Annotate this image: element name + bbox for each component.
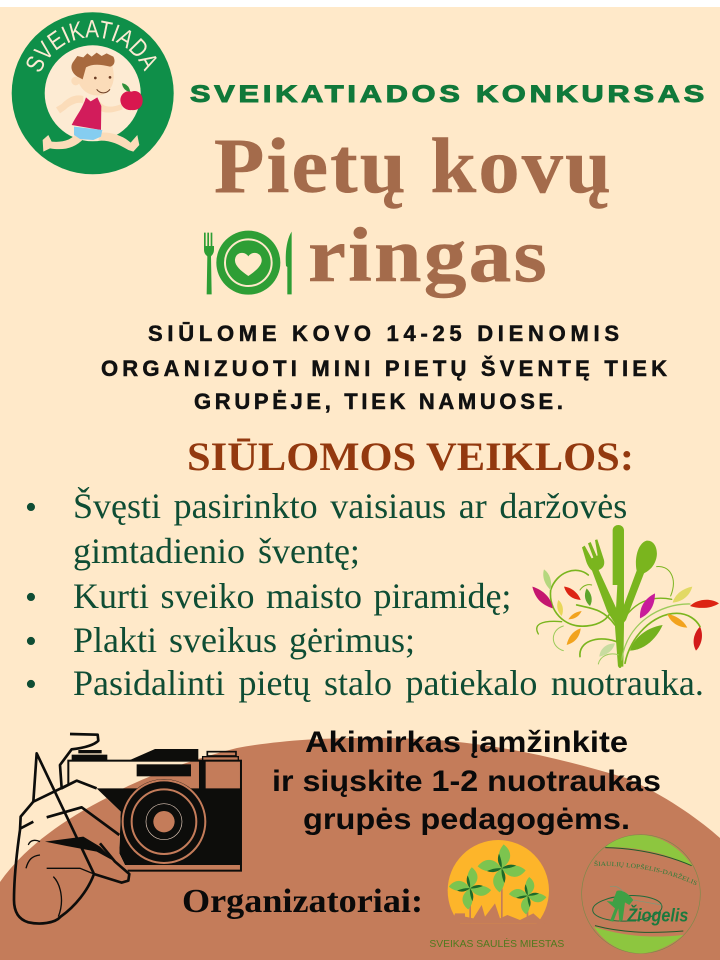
skyline xyxy=(452,903,545,924)
logo: Ziogelis kindergarten xyxy=(581,834,701,954)
boy hair xyxy=(71,53,115,79)
boy head xyxy=(78,63,114,96)
caption: SVEIKAS SAULĖS MIESTAS xyxy=(429,939,564,950)
logo: Sveikatiada xyxy=(12,12,174,174)
activity list: • xyxy=(25,666,37,703)
boy face xyxy=(94,77,97,79)
activity list: Plakti sveikus gėrimus; xyxy=(73,620,415,660)
intro text: ORGANIZUOTI MINI PIETŲ ŠVENTĘ TIEK xyxy=(101,356,667,381)
heading: Siūlomos veiklos: SIŪLOMOS VEIKLOS: xyxy=(187,434,634,479)
grasshopper xyxy=(592,886,663,923)
illustration: hand holding camera xyxy=(12,732,242,925)
pinwheels xyxy=(449,844,546,923)
logo: Sveikatiada: SVEIKATIADA xyxy=(26,20,157,72)
camera lens xyxy=(121,779,207,864)
boy arms xyxy=(56,95,123,113)
title line 1: Pietų kovų xyxy=(214,122,613,209)
leaves xyxy=(532,587,553,608)
brown hill shape xyxy=(0,738,720,960)
camera body xyxy=(68,749,242,871)
heading: Sveikatiados konkursas: SVEIKATIADOS KONKURSAS xyxy=(190,81,708,108)
call to action text: Akimirkas įamžinkite xyxy=(305,726,628,759)
activity list: Švęsti pasirinkto vaisiaus ar daržovės xyxy=(73,486,627,526)
boy shirt xyxy=(72,97,101,130)
call to action text: grupės pedagogėms. xyxy=(303,803,630,836)
intro text: GRUPĖJE, TIEK NAMUOSE. xyxy=(194,389,563,414)
hand xyxy=(12,732,131,925)
logo: Ziogelis kindergarten: Žiogelis xyxy=(626,905,688,926)
icon: plate with heart, fork and knife xyxy=(204,231,292,295)
intro text xyxy=(101,321,667,414)
boy legs xyxy=(43,132,139,152)
intro text: SIŪLOME KOVO 14-25 DIENOMIS xyxy=(148,321,619,346)
activity list: gimtadienio šventę; xyxy=(73,531,360,571)
call to action text xyxy=(272,726,661,836)
curling stems xyxy=(537,567,700,667)
boy shorts xyxy=(74,127,102,140)
fork, knife and spoon xyxy=(582,525,657,667)
apple xyxy=(120,91,143,110)
activity list: Kurti sveiko maisto piramidę; xyxy=(73,576,511,616)
activity list: Pasidalinti pietų stalo patiekalo nuotrauka. xyxy=(73,663,704,703)
title line 2: ringas xyxy=(308,212,549,298)
logo: Ziogelis kindergarten: ŠIAULIŲ LOPŠELIS-DARŽELIS xyxy=(594,860,698,885)
organizers label: Organizatoriai: xyxy=(182,883,423,920)
activity list: • xyxy=(25,579,37,616)
call to action text: ir siųskite 1-2 nuotraukas xyxy=(272,765,661,798)
illustration: cutlery plant xyxy=(532,525,719,667)
logo: Sveikas saulės miestas xyxy=(429,840,564,950)
activity list: • xyxy=(25,623,37,660)
activity list xyxy=(25,486,704,703)
activity list: • xyxy=(25,489,37,526)
